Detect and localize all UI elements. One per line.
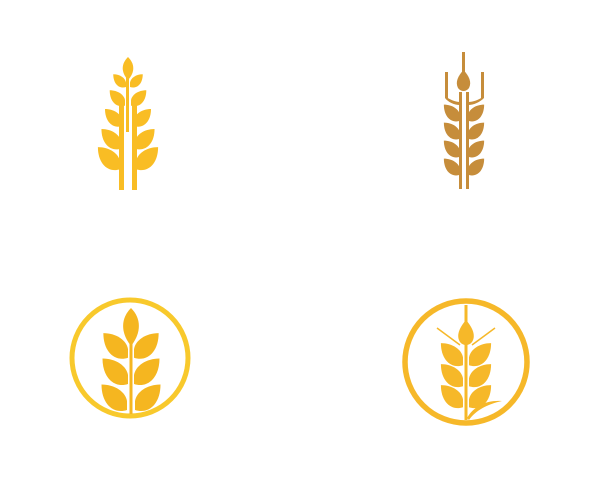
icon: wheat sprig golden — [98, 57, 158, 190]
icon: wheat in circle (right) — [405, 301, 527, 423]
icon: wheat in circle (left) — [72, 300, 188, 416]
icon: wheat sprig tan — [444, 52, 484, 189]
